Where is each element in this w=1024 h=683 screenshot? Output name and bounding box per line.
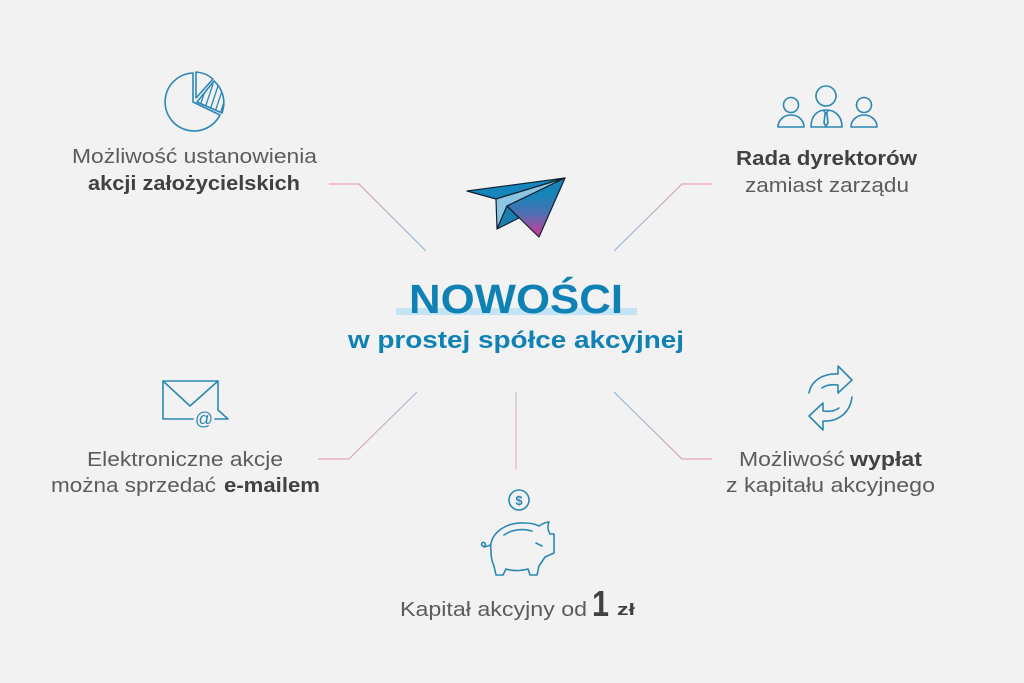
icon: coin: $	[515, 493, 523, 508]
text: wypłaty: z kapitału akcyjnego	[726, 475, 935, 497]
text: kapitał akcyjny	[400, 583, 635, 624]
icon: envelope with at sign	[163, 381, 228, 429]
text: elektroniczne akcje: e-mailem	[224, 475, 320, 497]
icon: paper plane	[467, 178, 565, 237]
connector: centre	[516, 392, 517, 469]
connector: bottom left	[318, 392, 417, 459]
text: rada dyrektorów	[736, 148, 917, 197]
connector: bottom right	[614, 392, 712, 459]
text: wypłaty	[726, 449, 935, 497]
panel: kapitał	[400, 490, 635, 624]
title underline highlight	[396, 308, 637, 315]
text: wypłaty: Możliwość	[739, 449, 845, 471]
text: elektroniczne akcje: można sprzedać	[51, 475, 216, 497]
text: akcje założycielskie: Możliwość ustanowienia	[72, 146, 318, 168]
infographic canvas	[52, 71, 934, 620]
icon: coin	[509, 490, 529, 510]
text: akcje założycielskie: akcji założycielskich	[88, 173, 300, 195]
panel: rada dyrektorów	[736, 86, 917, 197]
panel: elektroniczne akcje	[51, 381, 320, 497]
title	[396, 276, 637, 322]
icon: circular arrows	[809, 366, 852, 430]
connector: top left	[329, 184, 426, 251]
text: rada dyrektorów: zamiast zarządu	[745, 175, 909, 197]
icon: envelope with at sign: @	[195, 409, 213, 429]
text: rada dyrektorów: Rada dyrektorów	[736, 148, 917, 170]
text: kapitał akcyjny: 1	[592, 583, 609, 624]
text: elektroniczne akcje	[51, 449, 320, 497]
text: elektroniczne akcje: Elektroniczne akcje	[87, 449, 283, 471]
title text: NOWOŚCI	[409, 276, 623, 322]
text: kapitał akcyjny: Kapitał akcyjny od	[400, 599, 587, 621]
icon: piggy bank	[482, 522, 554, 575]
text: wypłaty: wypłat	[849, 449, 922, 471]
panel: wypłaty	[726, 366, 935, 497]
text: akcje założycielskie	[72, 146, 318, 195]
text: kapitał akcyjny: zł	[617, 600, 635, 619]
panel: założycielskie	[72, 72, 318, 195]
icon: three people	[778, 86, 877, 127]
icon: pie chart	[165, 72, 228, 131]
subtitle: w prostej spółce akcyjnej	[347, 327, 684, 354]
connector: top right	[614, 184, 712, 251]
